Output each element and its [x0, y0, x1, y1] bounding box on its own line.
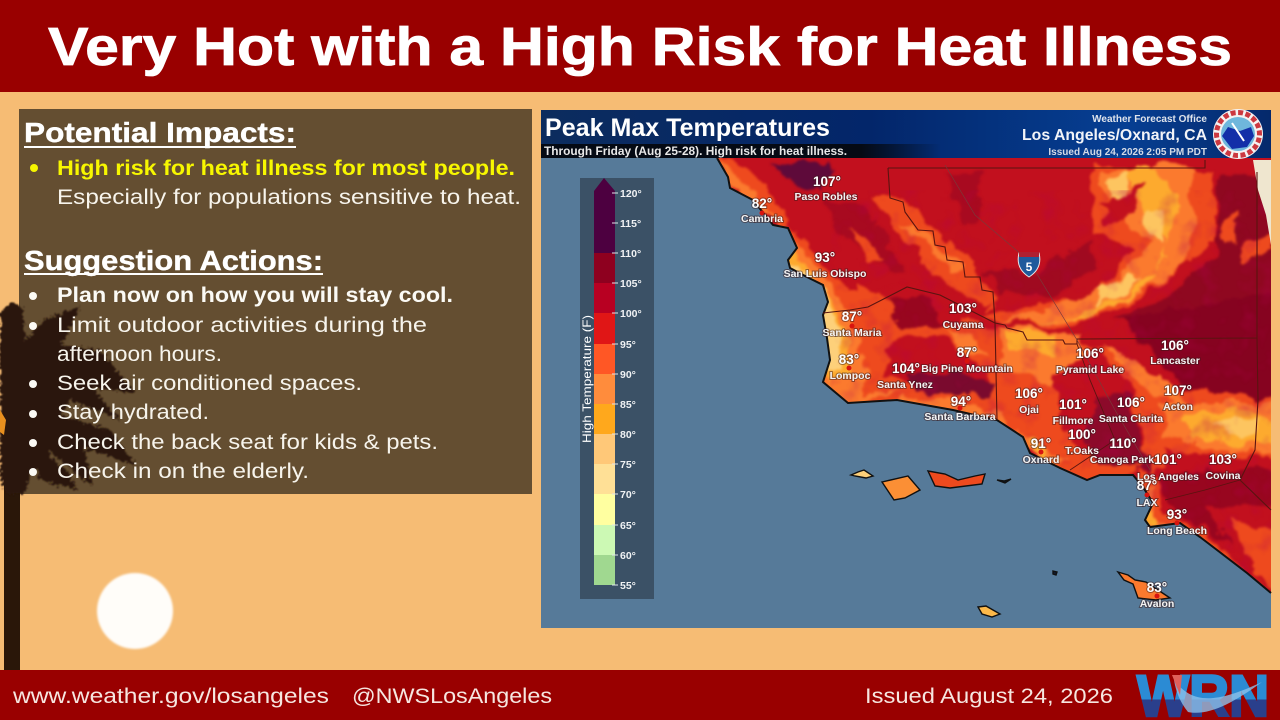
legend: high temperature scale: 60°	[620, 550, 636, 562]
footer: social handle: @NWSLosAngeles	[352, 685, 552, 708]
icon: NWS logo	[1213, 109, 1263, 159]
bullet: high risk: High risk for heat illness for most people.	[57, 157, 515, 180]
bullet list: Check the back seat for kids & pets.	[57, 431, 438, 454]
map: city temperature labels: 87°	[842, 309, 862, 324]
bullet list: Seek air conditioned spaces.	[57, 372, 362, 395]
map: city temperature labels: Avalon	[1140, 598, 1174, 610]
legend: high temperature scale: 80°	[620, 429, 636, 441]
legend: high temperature scale	[580, 178, 654, 599]
map: city temperature labels: Ojai	[1019, 404, 1039, 416]
legend: high temperature scale: 105°	[620, 278, 642, 290]
text block: suggestion actions	[24, 245, 453, 483]
bullet list: Plan now on how you will stay cool.	[57, 284, 453, 307]
map: land temperature contours	[700, 150, 1280, 600]
legend: high temperature scale: High Temperature (F)	[580, 315, 594, 443]
legend: high temperature scale: 120°	[620, 188, 642, 200]
map: city temperature labels: San Luis Obispo	[784, 268, 866, 280]
map: city temperature labels: Santa Barbara	[924, 411, 996, 423]
map: city temperature labels: Oxnard	[1023, 454, 1059, 466]
legend: high temperature scale: 55°	[620, 580, 636, 592]
title: Very Hot with a High Risk for Heat Illness	[48, 17, 1232, 77]
map: city temperature labels: 91°	[1031, 436, 1051, 451]
map: city temperature labels: 83°	[1147, 580, 1167, 595]
bullet list: Limit outdoor activities during the	[57, 314, 427, 337]
map: city temperature labels: Paso Robles	[794, 191, 858, 203]
bullet list: Stay hydrated.	[57, 401, 209, 424]
icon: palm tree silhouette	[0, 302, 136, 670]
forecast office block: Weather Forecast Office	[1092, 114, 1207, 125]
map: city temperature labels: 94°	[951, 394, 971, 409]
forecast office block: Issued Aug 24, 2026 2:05 PM PDT	[1048, 147, 1207, 158]
map title banner	[541, 109, 1271, 159]
map: city temperature labels: 106°	[1015, 386, 1043, 401]
text block: potential impacts	[24, 117, 521, 209]
east ventura and la county	[997, 325, 1280, 475]
hot interior maroon patches	[772, 160, 830, 190]
map: city temperature labels: 101°	[1059, 397, 1087, 412]
legend: high temperature scale: 95°	[620, 339, 636, 351]
map: coastline and county lines	[717, 158, 1271, 593]
map: city temperature labels: 100°	[1068, 427, 1096, 442]
bullet list: Check in on the elderly.	[57, 460, 309, 483]
map: city temperature labels: Pyramid Lake	[1056, 364, 1124, 376]
map: city temperature labels: 110°	[1109, 436, 1137, 451]
map: city temperature labels: Santa Clarita	[1099, 413, 1163, 425]
legend: high temperature scale: 110°	[620, 248, 641, 260]
map: city temperature labels: 107°	[813, 174, 841, 189]
map: city temperature labels: Canoga Park	[1090, 454, 1154, 466]
map: city temperature labels	[741, 174, 1241, 610]
legend: high temperature scale: 85°	[620, 399, 636, 411]
map: city temperature labels: Acton	[1163, 401, 1193, 413]
bullet list: afternoon hours.	[57, 343, 222, 366]
map: state nevada strip	[1253, 160, 1271, 245]
map: city temperature labels: 106°	[1117, 395, 1145, 410]
legend: high temperature scale: 75°	[620, 459, 636, 471]
legend: high temperature scale: 90°	[620, 369, 636, 381]
mountain band orange	[872, 195, 1000, 312]
map: city temperature labels: Lompoc	[830, 370, 871, 382]
map: city temperature labels: 87°	[1137, 478, 1157, 493]
map: city temperature labels: 93°	[1167, 507, 1187, 522]
map: city temperature labels: 106°	[1076, 346, 1104, 361]
footer bar	[0, 664, 1280, 720]
map: city temperature labels: 103°	[1209, 452, 1237, 467]
map: city temperature labels: T.Oaks	[1065, 445, 1099, 457]
map: city temperature labels: 101°	[1154, 452, 1182, 467]
map: city temperature labels: Lancaster	[1150, 355, 1200, 367]
forecast office block	[1022, 114, 1207, 158]
ocean	[541, 110, 1271, 628]
map: city temperature labels: Los Angeles	[1137, 471, 1199, 483]
map: city temperature labels: Santa Maria	[823, 327, 882, 339]
panel: temperature map	[541, 109, 1280, 628]
map: city temperature labels: 103°	[949, 301, 977, 316]
map: city temperature labels: Long Beach	[1147, 525, 1207, 537]
legend: high temperature scale: 70°	[620, 489, 636, 501]
map title: Peak Max Temperatures	[545, 114, 830, 142]
coastal strip	[715, 155, 1140, 490]
icon: sun	[97, 573, 173, 649]
icon: interstate 5 shield: 5	[1026, 260, 1033, 274]
map: city temperature labels: 106°	[1161, 338, 1189, 353]
northeast hot streaks	[1220, 215, 1240, 245]
footer: issued date: Issued August 24, 2026	[865, 685, 1113, 708]
heading: suggestion actions: Suggestion Actions:	[24, 245, 323, 276]
map: city markers	[760, 210, 1180, 598]
map: city temperature labels: Cambria	[741, 213, 783, 225]
legend: high temperature scale: 65°	[620, 520, 636, 532]
heading: potential impacts: Potential Impacts:	[24, 117, 296, 148]
legend: high temperature scale: 115°	[620, 218, 641, 230]
la basin & orange county	[1158, 464, 1271, 544]
icon: interstate 5 shield	[1018, 252, 1040, 277]
map: city temperature labels: 107°	[1164, 383, 1192, 398]
map: city temperature labels: Fillmore	[1053, 415, 1094, 427]
legend: high temperature scale: 100°	[620, 308, 642, 320]
map subtitle: Through Friday (Aug 25-28). High risk for heat illness.	[544, 146, 847, 158]
header banner	[0, 0, 1280, 92]
map: city temperature labels: 93°	[815, 250, 835, 265]
map: city temperature labels: Covina	[1205, 470, 1241, 482]
map: city temperature labels: Santa Ynez	[877, 379, 933, 391]
footer: website: www.weather.gov/losangeles	[12, 685, 329, 708]
map: city temperature labels: 83°	[839, 352, 859, 367]
map: city temperature labels: Cuyama	[943, 319, 984, 331]
bullet list	[29, 284, 453, 483]
map: islands	[851, 470, 1170, 617]
map: city temperature labels: Big Pine Mountain	[921, 363, 1013, 375]
santa ynez - cuyama mountains	[850, 285, 1002, 420]
map: city temperature labels: LAX	[1136, 497, 1158, 509]
map: city temperature labels: 87°	[957, 345, 977, 360]
map: city temperature labels: 82°	[752, 196, 772, 211]
map: terrain mottling	[830, 190, 1271, 590]
forecast office block: Los Angeles/Oxnard, CA	[1022, 127, 1207, 144]
text: sensitive populations: Especially for populations sensitive to heat.	[57, 186, 521, 209]
map: city temperature labels: 104°	[892, 361, 920, 376]
panel: text background	[19, 109, 532, 494]
